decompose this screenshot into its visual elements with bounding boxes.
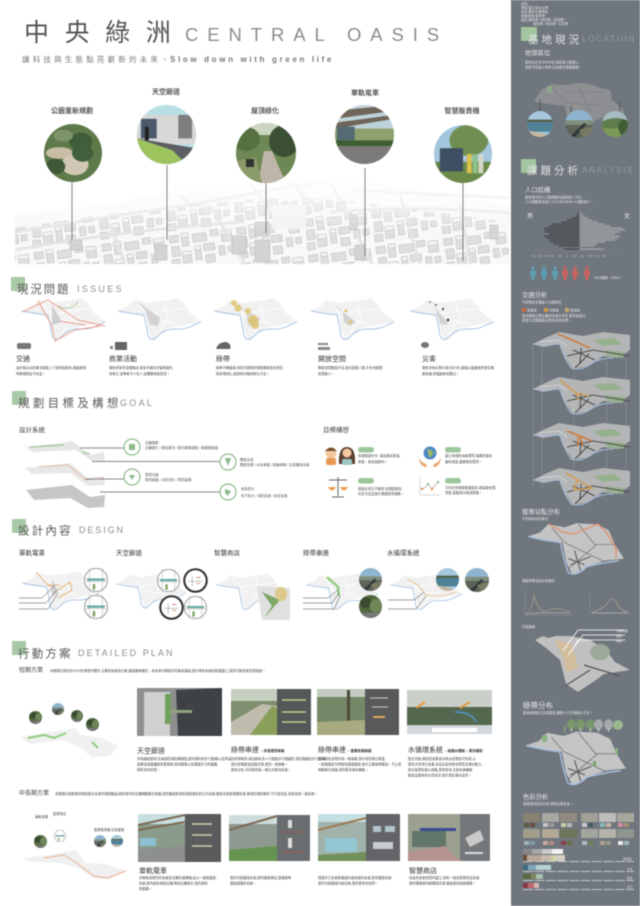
text: station: 連結道路的系統。 bbox=[230, 880, 256, 886]
text: monorail: 系統,將內部系統與交通,降低交通量也,提供便利 bbox=[139, 880, 208, 886]
colour scale bars: 水系 bbox=[627, 867, 633, 871]
map: green belt: 基地綠帶缺乏且覆蓋低,需要人行步道綠化不足。 bbox=[523, 710, 593, 715]
design: monorail: 單軌電車 bbox=[19, 548, 46, 557]
short-term site diagram bbox=[20, 703, 118, 757]
text: stop: 提供內部連接內部系統,提供更多的空間。 bbox=[318, 880, 378, 886]
text: monorail: 的服務。 bbox=[139, 886, 152, 891]
text: traffic analysis: 中峰量 bbox=[549, 308, 560, 312]
diagram: design system: 交通優化 / 降低車流 / 提升轉乘接駁 / 綠道路串連 bbox=[145, 445, 219, 450]
goals concept: 建立地球的永續環境,強調資源永 bbox=[445, 453, 493, 458]
goals concept: 參與、安全與便利。 bbox=[358, 459, 388, 464]
map: walking route: 綠道 bbox=[616, 638, 622, 643]
issue: green belt: 綠帶 bbox=[216, 354, 230, 363]
hero feature: sky corridor: 天空廊道 bbox=[152, 87, 180, 96]
text: water cycle: 將水循環系統以增進,保持當地,生態系統機能 bbox=[408, 767, 473, 772]
hero feature: roof greening bbox=[232, 106, 299, 233]
title bbox=[24, 19, 448, 47]
issue: disaster: 現有流地水問大雨大於2年,極端災害越來的發生頻 bbox=[422, 365, 495, 370]
diagram: design system: 環境維護 / 水質淨化 / 環境景觀 bbox=[145, 477, 192, 482]
short-term text: 短期方案 bbox=[19, 666, 43, 674]
layer 4 bbox=[533, 468, 630, 505]
text: green corridor B bbox=[318, 745, 402, 772]
heading: design: DESIGN bbox=[79, 525, 125, 535]
text: water cycle: 提供水質淨化效果,改善目前的綠地環境及滯洪能力, bbox=[408, 762, 482, 766]
heading: location: 基地現況 bbox=[528, 33, 582, 46]
issue: commercial: 商業活動 bbox=[109, 354, 137, 363]
text: sky corridor: 天空廊道 bbox=[137, 746, 165, 755]
map: walking route: 河岸步道 bbox=[616, 628, 628, 633]
text: geographic location bbox=[525, 48, 582, 70]
text: monorail: 本單軌電車的的系統及交通系統網絡,並以一個點連結, bbox=[139, 875, 217, 880]
heading: detailed plan bbox=[12, 641, 175, 660]
project info text: 系所:都市計畫學系 bbox=[521, 9, 549, 14]
text: green corridor A: 提升舒適度並創造步道,提供一個串聯。 bbox=[231, 762, 288, 766]
text: sky corridor: 作為連結使用,在每個區域的轉換點,提供便利的步行動線以及停留, bbox=[137, 756, 232, 761]
subtitle: · bbox=[164, 55, 167, 64]
hero feature: smart vending machine: 智慧販賣機 bbox=[444, 106, 480, 115]
text: traffic analysis: 低峰量 bbox=[570, 308, 581, 312]
icons: population by gender: 2019總統 : 2054人 bbox=[594, 275, 622, 280]
photo: smart shop bbox=[408, 814, 490, 861]
text: sky corridor: 將舊有的空間。 bbox=[137, 767, 160, 772]
text: smart shop: 提供周邊便利服務與資源,連結便利設施服務。 bbox=[409, 880, 476, 886]
colour scale bars bbox=[523, 849, 634, 890]
colour photo grid bbox=[523, 813, 634, 845]
heading: issues bbox=[11, 277, 124, 296]
goals concept bbox=[323, 425, 496, 497]
chart: population pyramid: 人口總數逐漸減少,2017年2964戶人相較減少。 bbox=[525, 199, 593, 204]
project info text bbox=[521, 1, 569, 26]
colour scale bars: 綠意 bbox=[627, 876, 633, 880]
chart: population pyramid: 人口結構 bbox=[525, 185, 551, 194]
map: green belt bbox=[523, 700, 626, 785]
project info text: 指導老師:張老師 bbox=[521, 13, 546, 18]
layer 1 bbox=[533, 332, 630, 369]
map: walking route: 廊道 bbox=[616, 633, 622, 638]
diagram: design system: 地下防災 / 消防系統 / 安全系統 bbox=[241, 493, 288, 498]
layer 3 bbox=[533, 423, 630, 460]
text: water cycle: 水循環系統 ・雨撲水體統、滯洪機制 bbox=[408, 745, 483, 754]
design: smart shops: 智慧商店 bbox=[214, 548, 240, 557]
text: smart shop bbox=[409, 866, 480, 886]
map: station distribution: 搜尋站點分布 bbox=[522, 507, 560, 516]
chart: population pyramid: 500 400 300 200 100 0 100 200 300 400 500 bbox=[531, 254, 607, 258]
heading: issues: ISSUES bbox=[77, 284, 124, 294]
icon: transit bbox=[124, 439, 236, 500]
photo: green hill bbox=[602, 111, 629, 137]
hero feature: smart vending machine bbox=[434, 106, 492, 261]
diagram: design system: 開放生態 bbox=[240, 457, 254, 462]
colour scale bars: 活力 bbox=[627, 885, 633, 889]
design: sky corridor bbox=[116, 548, 207, 619]
icon: line chart bbox=[420, 477, 440, 495]
goals concept: 提高社會公平機會,並規劃居民 bbox=[358, 486, 402, 491]
mid-long term text: 本期預計將較長的時段配合未來的規劃願景,將區域內的交通網絡整合串連,提供連結舊城區與新城區的公共系統,運用未來新發展區域,串接區域的機會,不只是改善,而是完成一個系統。 bbox=[55, 791, 318, 796]
project info text: 學校:國立成功大學 bbox=[521, 5, 549, 10]
issue: traffic: 停車規劃並不完善。 bbox=[16, 371, 46, 376]
heading: design bbox=[12, 519, 125, 538]
photo: river bbox=[527, 111, 553, 137]
photo: water cycle bbox=[407, 690, 492, 734]
mid-long term text bbox=[19, 789, 318, 797]
design: green corridor: 綠帶串連 bbox=[303, 548, 330, 557]
mid-long term site diagram bbox=[23, 811, 127, 879]
diagram: design system: 交通規劃 bbox=[145, 440, 159, 445]
issue: traffic: 交通 bbox=[16, 354, 30, 363]
photo: monorail stop bbox=[318, 814, 400, 861]
heading: issues: 現況問題 bbox=[17, 282, 70, 296]
heading: analysis: 課題分析 bbox=[527, 164, 581, 177]
heading: analysis: ANALYSIS bbox=[582, 166, 634, 174]
text: geographic location: 基地位於台中市中區,鄰近綠川與柳川, bbox=[525, 60, 580, 64]
map: station distribution bbox=[522, 507, 624, 575]
text: traffic analysis: 交通分析 bbox=[522, 290, 548, 299]
issue: commercial: 有吸引,並帶來不少的人,還需要串起街區。 bbox=[109, 371, 170, 376]
text: monorail: 單軌電車 bbox=[139, 866, 167, 875]
text: colour analysis bbox=[523, 792, 573, 806]
text: traffic analysis bbox=[522, 290, 587, 322]
heading: detailed plan: DETAILED PLAN bbox=[78, 648, 175, 658]
layered site models bbox=[25, 441, 105, 508]
heading: analysis bbox=[521, 159, 634, 177]
callout lines bbox=[563, 630, 625, 655]
chart: population pyramid bbox=[525, 185, 630, 258]
hero feature: park redesign: 公園重新規劃 bbox=[51, 106, 93, 115]
heading: location bbox=[521, 27, 636, 46]
map: walking route: 步道路線 bbox=[522, 624, 536, 629]
goals concept: 在規劃設計中, 增加居民參與, bbox=[358, 453, 400, 458]
icons: population by gender bbox=[530, 266, 622, 280]
text: green corridor A: 綠地分布,共同提供每一個公共綠地系統。 bbox=[231, 767, 291, 772]
charts: usage line charts bbox=[522, 578, 628, 615]
map: station distribution: 不同時段尋找車位 bbox=[522, 516, 549, 521]
issue: traffic: 由於南北向的車流量較上下班時段較多,路面狹窄, bbox=[16, 365, 87, 370]
diagram: design system: 環境共融 bbox=[145, 472, 159, 477]
project info text: 成員: bbox=[521, 1, 529, 6]
design: sky corridor: 天空廊道 bbox=[116, 548, 142, 557]
text: traffic analysis: 不同時段交通量十分頻繁區 bbox=[522, 300, 562, 304]
text: colour analysis: 透過現況色彩分析,提取主要色系。 bbox=[523, 801, 573, 806]
hero feature: monorail: 單軌電車 bbox=[351, 88, 379, 97]
text: traffic analysis: 基地周邊主要交通流向皆往市區,車流量龐大, bbox=[522, 313, 587, 318]
map: green belt: 綠帶分布 bbox=[523, 700, 553, 710]
issue: open space: 開放空間都還不足,居住密度人群,戶外地綠閒 bbox=[318, 365, 382, 370]
text: green corridor A: 利用現有的,增加綠色及人行道與步行連續性,提供路面的步行區域, bbox=[231, 756, 326, 761]
photo: riverbank bbox=[565, 110, 593, 138]
text: geographic location: 為舊市區核心地帶,具有歷史發展脈絡。 bbox=[525, 64, 582, 70]
text: green corridor B: 綠帶串連 ・重要街廓綠廊 bbox=[318, 745, 372, 754]
title: CENTRAL OASIS bbox=[185, 24, 448, 45]
issue: green belt bbox=[214, 298, 297, 376]
mid-long term text: 中長期方案 bbox=[19, 789, 49, 797]
text: monorail bbox=[139, 866, 217, 891]
text: water cycle: 能改善基地的水質狀況,提升居民親水品質。 bbox=[408, 772, 472, 778]
design: green corridor bbox=[303, 548, 382, 618]
design: monorail bbox=[19, 548, 108, 619]
charts: usage line charts: 周邊停車尋找分布統計 bbox=[522, 578, 556, 583]
text: water cycle bbox=[408, 745, 483, 778]
mid-long term site diagram: 智慧販賣機 bbox=[94, 827, 111, 832]
subtitle: Slow down with green life bbox=[170, 55, 334, 64]
heading: goal: GOAL bbox=[120, 398, 154, 408]
diagram: design system: 安全防災 bbox=[241, 486, 255, 491]
issue: commercial: 現有商家多是傳統店,就多半都在於被商圈內 bbox=[109, 365, 173, 370]
subtitle bbox=[22, 54, 334, 64]
text: station: 提供內部連接系統,提供連接車站,發展綠帶 bbox=[230, 875, 292, 880]
layer 2 bbox=[533, 377, 630, 414]
photo: sky corridor building bbox=[137, 688, 222, 736]
issue: disaster: 災害 bbox=[422, 354, 436, 363]
heading: design: 設計內容 bbox=[18, 524, 73, 538]
title: 中央綠洲 bbox=[24, 19, 186, 47]
text: colour analysis: 色彩分析 bbox=[523, 792, 549, 801]
text: green corridor B: 串聯綠化接連,提供更多綠色機能。 bbox=[318, 767, 368, 772]
icon: earth in hands bbox=[419, 446, 441, 467]
project info text: 劉同學 / 李同學 / 王同學 bbox=[533, 21, 569, 26]
hero feature: sky corridor bbox=[137, 87, 196, 240]
chart: population pyramid: 男 bbox=[527, 213, 533, 220]
text: green corridor B: 一條道路從中間綠色道路連接,提升主要綠帶連結。不止是 bbox=[318, 762, 402, 766]
hero feature: monorail bbox=[335, 88, 394, 256]
map: site location with photos bbox=[527, 83, 629, 138]
text: traffic analysis: 易發生交通壅塞且對安全有影響。 bbox=[522, 318, 571, 322]
issue: green belt: 綠帶不夠連接,地區內閒閒的現閒置綠地多的區, bbox=[216, 365, 284, 370]
goals concept: 境業,促進提升經濟發展。 bbox=[445, 490, 482, 495]
chart: stacked traffic maps bbox=[533, 332, 630, 505]
right sidebar panel bbox=[511, 0, 640, 906]
mid-long term site diagram: 智慧商店 bbox=[53, 811, 67, 816]
design: water cycle bbox=[387, 548, 489, 610]
issue: open space bbox=[311, 298, 394, 376]
issue: open space: 空間較少。 bbox=[318, 371, 334, 376]
photo: green corridor B bbox=[317, 689, 399, 735]
diagram: design system: 開放空間 / 水系串連 / 綠道串聯 / 生態棲地系統 bbox=[240, 462, 310, 467]
short-term text bbox=[19, 666, 265, 674]
issue: green belt: 除非現地化,還缺有共融的綠化不足。 bbox=[216, 371, 270, 376]
chart: population pyramid: 女 bbox=[624, 212, 630, 220]
colour scale bars: 建築物 bbox=[623, 857, 632, 861]
text: geographic location: 地理區位 bbox=[525, 48, 551, 57]
project info text: 組員:陳同學 / 林同學 / 黃同學 / bbox=[521, 17, 566, 22]
design: water cycle: 水循環系統 bbox=[387, 548, 420, 557]
photo: monorail station bbox=[229, 815, 310, 861]
issue: disaster: 度有越,保護越來有關注。 bbox=[422, 371, 459, 376]
goals concept: 平均社會規劃發展投資,提高綠地環 bbox=[445, 485, 496, 490]
mid-long term site diagram: 單軌電車 bbox=[35, 814, 49, 819]
hero feature: roof greening: 屋頂綠化 bbox=[251, 106, 279, 115]
photo: green corridor A bbox=[231, 689, 311, 735]
icon: people bbox=[325, 447, 355, 465]
text: green corridor A: 綠帶串連 ・步道連帶串聯 bbox=[231, 745, 285, 754]
goals concept: 續利用與,建置綠色環境。 bbox=[445, 459, 482, 464]
issue: open space: 開放空間 bbox=[318, 354, 346, 363]
map: walking route bbox=[522, 624, 630, 692]
mid-long term site diagram: 天空廊道 bbox=[111, 827, 125, 832]
text: traffic analysis: 高峰量 bbox=[527, 308, 538, 312]
issue: disaster bbox=[410, 298, 495, 376]
text: smart shop: 智慧商店 bbox=[409, 866, 437, 875]
issue: traffic bbox=[16, 298, 105, 376]
text: smart shop: 在這些系統空間內建立,設有一個全智慧商店系統, bbox=[409, 875, 480, 880]
text: station bbox=[230, 875, 292, 886]
heading: location: LOCATION bbox=[582, 34, 636, 44]
issue: commercial bbox=[109, 298, 201, 376]
text: green corridor A bbox=[231, 745, 326, 772]
illustration: city background bbox=[14, 191, 510, 264]
photo: monorail bbox=[138, 814, 221, 862]
heading: goal: 規劃目標及構想 bbox=[18, 396, 122, 410]
subtitle: 讓科技與生態點亮嶄新的未來 bbox=[22, 54, 161, 64]
goals concept: 共享共生並提升周邊環境適應。 bbox=[358, 491, 404, 496]
diagram: design system bbox=[19, 425, 310, 508]
text: sky corridor: 設置高架連通與商業規劃,提供轉乘以及周邊步行的連通, bbox=[137, 762, 218, 766]
text: stop bbox=[318, 875, 392, 886]
icon: scales bbox=[328, 477, 348, 497]
text: green corridor B: 選擇綠色空間作為一條綠廊,提升街區綠化覆蓋, bbox=[318, 756, 386, 761]
goals concept: 目標構想 bbox=[323, 425, 350, 434]
chart: population pyramid: 基地現今的人口結構趨向高齡與少子化, bbox=[525, 194, 582, 200]
diagram: design system: 設計系統 bbox=[19, 425, 46, 434]
text: sky corridor bbox=[137, 746, 232, 772]
text: water cycle: 配合河道,將街區收集雨水積水處理及可利用,以 bbox=[408, 756, 476, 761]
heading: goal bbox=[12, 391, 154, 410]
hero feature: park redesign bbox=[44, 106, 102, 240]
design: smart shops bbox=[214, 548, 290, 620]
text: stop: 透過步行系統串連與內部系統的系統,提供連接系統 bbox=[318, 875, 392, 880]
short-term text: 本期預計將在於2023年時間內實作,主要的系統及計畫,連接著串聯區、為未來中期與市區聯系連接,提升現有系統的新建建立,提供可能的新空間設施。 bbox=[50, 668, 265, 673]
heading: detailed plan: 行動方案 bbox=[18, 646, 73, 660]
